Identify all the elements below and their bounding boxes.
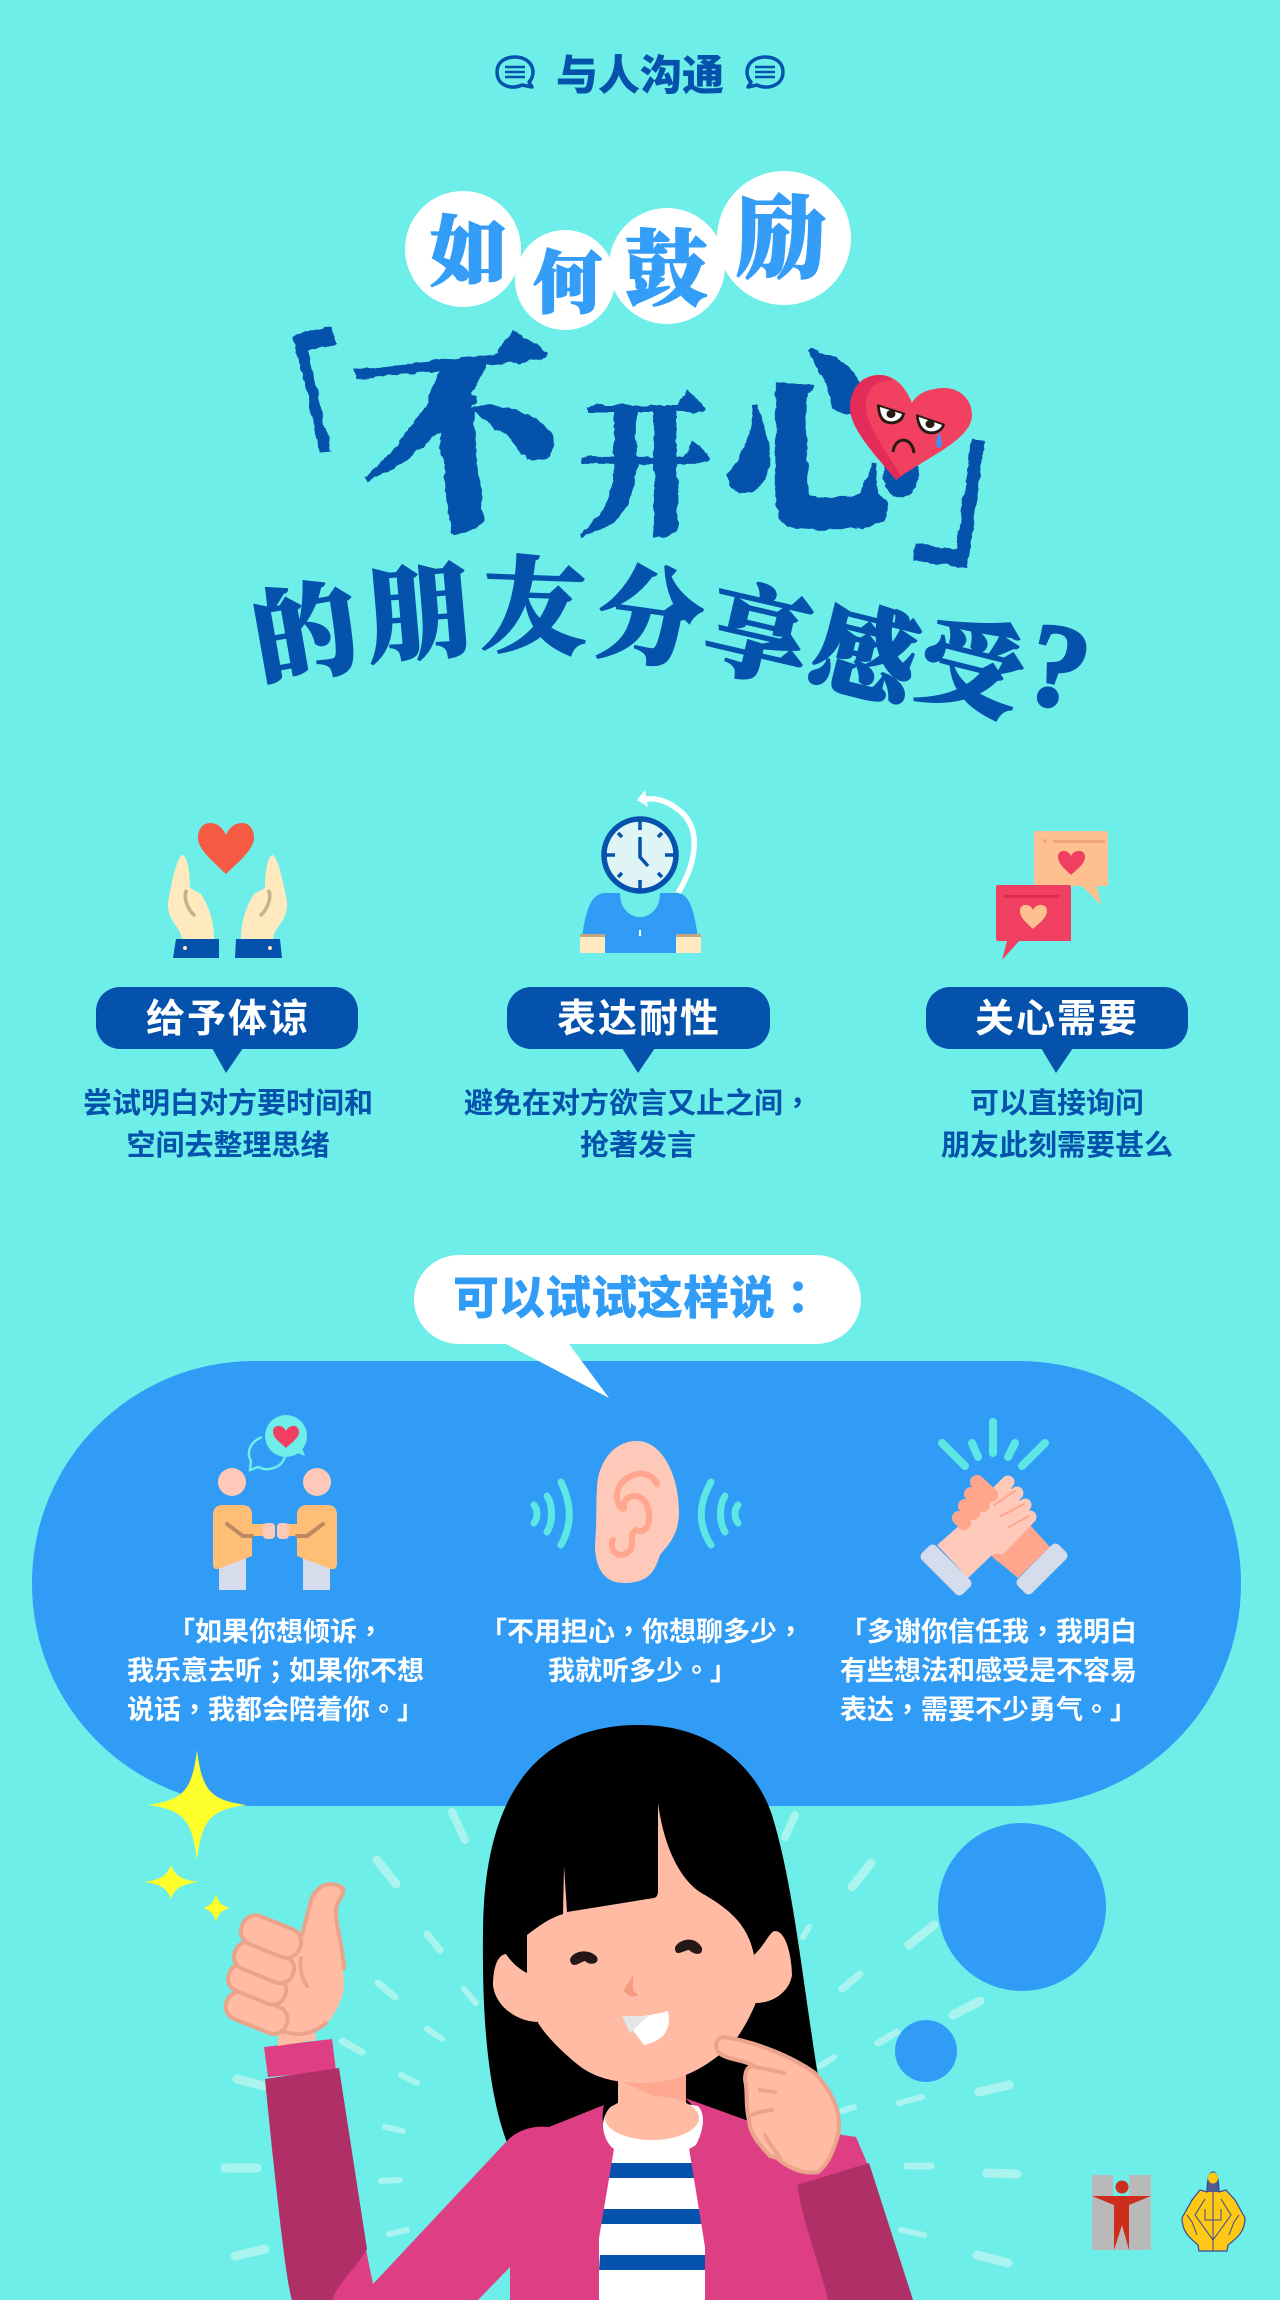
collar (603, 2104, 703, 2149)
decorative rays behind the woman (225, 1812, 1017, 2263)
header text: 与人沟通 (556, 52, 724, 99)
text: phrase 1 (127, 1610, 424, 1727)
title: 的朋友分享感受? arced subtitle: 受 (908, 602, 1034, 737)
text: tip 2 description (464, 1080, 812, 1162)
jacket (320, 2098, 913, 2300)
illustration: smiling woman giving thumbs up (222, 1725, 913, 2300)
raised arm sleeve (264, 2039, 367, 2300)
header: topic label (497, 52, 783, 99)
title: 不开心 in rough lettering: 」 (910, 374, 1082, 598)
icon: hands holding heart (168, 823, 287, 958)
text: tip 2 description: 抢著发言 (580, 1129, 696, 1162)
panel: tip 3, ask about needs (926, 831, 1188, 1162)
title: 的朋友分享感受? arced subtitle: 朋 (361, 554, 475, 677)
face (527, 1803, 757, 2083)
icon: two friends fist bump (213, 1415, 337, 1590)
logo: gold hands emblem (1182, 2172, 1245, 2251)
decorative blue circle, large (938, 1823, 1106, 1991)
hand at chin (716, 2037, 839, 2173)
text: phrase 2: 我就听多少。」 (548, 1649, 737, 1688)
phrase 1: willing to listen (127, 1415, 424, 1727)
text: tip 3 description: 可以直接询问 (970, 1087, 1144, 1120)
panel: tip 2, show patience (464, 790, 812, 1162)
text: phrase 1: 说话，我都会陪着你。」 (127, 1688, 424, 1727)
title: how to encourage, in circles: 励 (736, 191, 826, 290)
text: tip 3 description: 朋友此刻需要甚么 (941, 1129, 1173, 1162)
pill: 给予体谅 (96, 987, 358, 1073)
title: 的朋友分享感受? arced subtitle: 的 (245, 570, 367, 702)
text: tip 1 description: 空间去整理思绪 (126, 1129, 330, 1162)
text: phrase 1: 「如果你想倾诉， (168, 1610, 384, 1649)
text: phrase 2 (480, 1610, 804, 1688)
hair (483, 1725, 835, 2150)
title: 的朋友分享感受? arced subtitle: 感 (801, 590, 936, 727)
right ear (754, 1931, 792, 2003)
icon: right chat bubble (747, 57, 783, 87)
title: 不开心 in rough lettering: 开 (577, 387, 713, 556)
neckline skin (605, 2096, 699, 2140)
text: tip 2 description: 避免在对方欲言又止之间， (464, 1080, 812, 1122)
title: how to encourage, in circles: 鼓 (625, 225, 707, 316)
title: 的朋友分享感受? arced subtitle: 友 (480, 550, 588, 669)
logo: grey H with red figure (1092, 2175, 1151, 2250)
icon: left chat bubble (497, 57, 533, 87)
decorative blue circle, small (895, 2020, 957, 2082)
right sleeve (797, 2163, 913, 2300)
neck (618, 2070, 686, 2130)
sparkles (144, 1750, 246, 1922)
text: phrase 2: 「不用担心，你想聊多少， (480, 1610, 804, 1649)
pill: 表达耐性: 表达耐性 (557, 998, 721, 1041)
text: phrase 3: 有些想法和感受是不容易 (840, 1655, 1137, 1686)
phrase 3: thank you for trusting me (840, 1422, 1137, 1727)
pill: 给予体谅: 给予体谅 (146, 998, 310, 1041)
pill: 关心需要 (926, 987, 1188, 1073)
text: tip 1 description (83, 1087, 373, 1162)
title: 的朋友分享感受? arced subtitle: 享 (695, 572, 820, 705)
left ear (493, 1954, 540, 2022)
text: phrase 1: 我乐意去听；如果你不想 (127, 1649, 424, 1688)
icon: ear with sound waves (534, 1441, 738, 1583)
pill: 关心需要: 关心需要 (975, 998, 1139, 1041)
striped shirt (599, 2130, 705, 2300)
title: how to encourage, in circles: 何 (534, 246, 602, 322)
speech bubble: try saying this (414, 1255, 861, 1398)
text: phrase 3: 表达，需要不少勇气。」 (840, 1688, 1137, 1727)
pill: 表达耐性 (507, 987, 770, 1073)
text: tip 1 description: 尝试明白对方要时间和 (83, 1087, 373, 1120)
title: 不开心 in rough lettering: 「 (233, 326, 374, 536)
speech bubble: try saying this: 可以试试这样说： (453, 1262, 821, 1328)
panel: blue rounded panel of sample phrases (32, 1361, 1241, 1806)
icon: clasped hands (918, 1422, 1070, 1598)
title: 的朋友分享感受? arced subtitle: 分 (590, 556, 709, 684)
icon: sad heart (850, 375, 972, 480)
thumbs-up hand (222, 1884, 345, 2046)
icon: two chat bubbles with hearts (996, 831, 1108, 960)
text: tip 3 description (941, 1087, 1173, 1162)
text: phrase 3 (840, 1610, 1137, 1727)
panel: tip 1, give understanding (83, 823, 373, 1162)
title: how to encourage, in circles: 如 (430, 212, 506, 296)
text: phrase 3: 「多谢你信任我，我明白 (840, 1610, 1137, 1649)
title: 不开心 in rough lettering: 心 (725, 339, 950, 562)
title: 不开心 in rough lettering: 不 (347, 319, 582, 564)
title: 的朋友分享感受? arced subtitle (245, 550, 1102, 738)
icon: clock-head person (580, 790, 701, 953)
title: how to encourage, in circles (405, 171, 851, 330)
phrase 2: no worries (480, 1441, 804, 1688)
title: 的朋友分享感受? arced subtitle: ? (1015, 595, 1102, 738)
title: 不开心 in rough lettering (233, 319, 1082, 598)
